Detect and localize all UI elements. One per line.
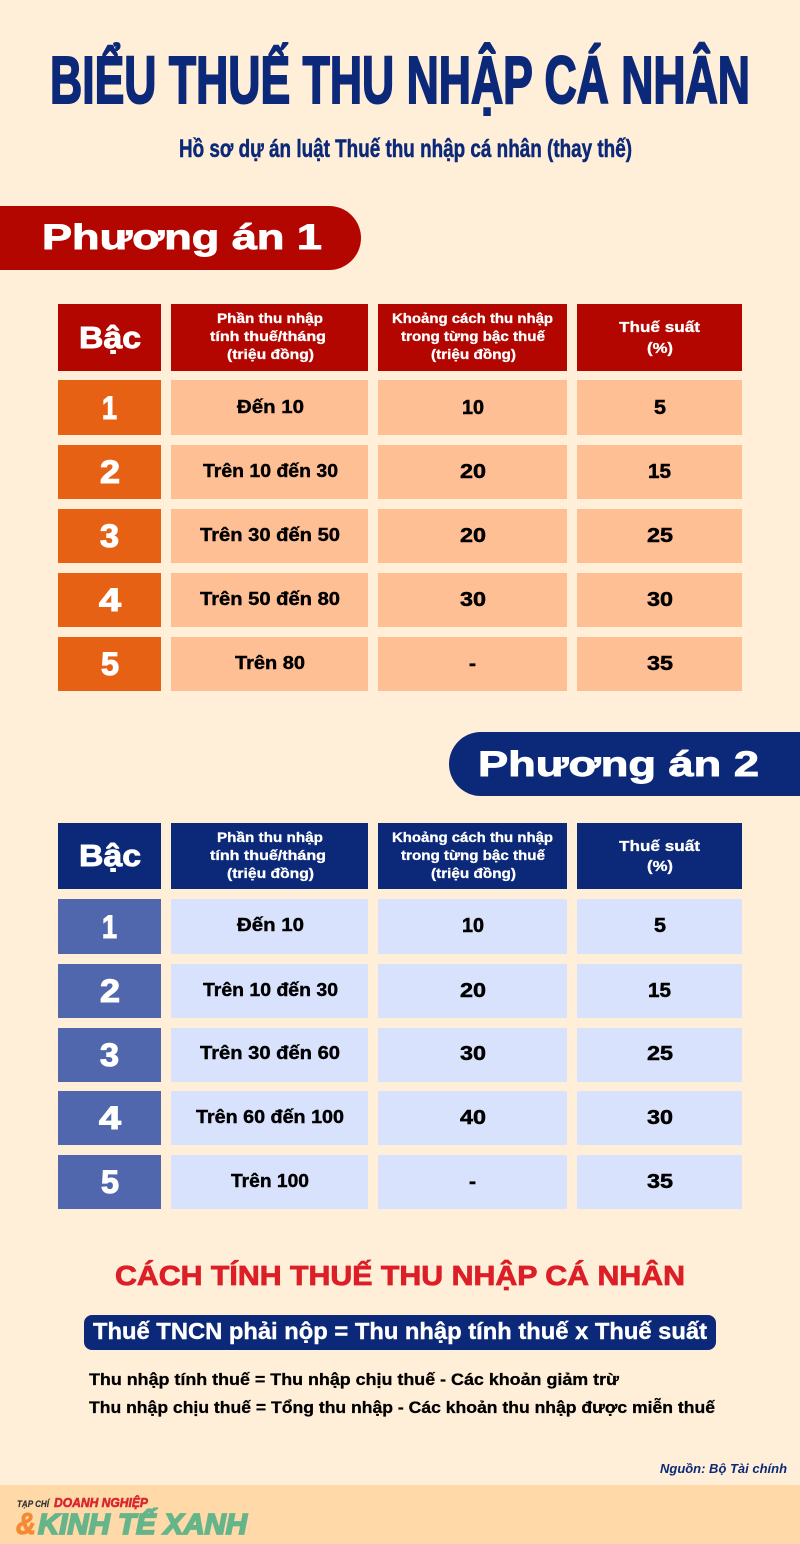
header row: Thuế suất (619, 838, 700, 855)
row 5: 5 (101, 646, 119, 682)
row 2 (58, 445, 742, 499)
formula text line 2: Thu nhập chịu thuế = Tổng thu nhập - Các khoản thu nhập được miễn thuế (89, 1398, 716, 1417)
header row: (triệu đồng) (227, 346, 314, 362)
row 5: Trên 100 (231, 1171, 309, 1191)
row 3 (58, 1028, 742, 1082)
row 3: 3 (100, 518, 119, 554)
row 5 (58, 637, 742, 691)
row 1 (58, 899, 742, 954)
header row: (triệu đồng) (431, 346, 516, 362)
formula pill (84, 1315, 716, 1350)
logo: Tạp chí Doanh nghiệp & Kinh tế Xanh: & (16, 1506, 36, 1541)
row 4: Trên 60 đến 100 (196, 1107, 344, 1127)
subtitle: Hồ sơ dự án luật Thuế thu nhập cá nhân (thay thế) (179, 135, 632, 163)
header row: tính thuế/tháng (210, 328, 326, 344)
header row: (triệu đồng) (227, 865, 314, 881)
row 3 (58, 509, 742, 563)
header row: trong từng bậc thuế (401, 328, 545, 344)
header row: trong từng bậc thuế (401, 847, 545, 863)
table: Phương án 1 (58, 304, 742, 691)
row 2: 20 (460, 980, 486, 1002)
row 5: 35 (647, 653, 673, 675)
header row: (%) (647, 858, 673, 875)
header row: Khoảng cách thu nhập (392, 310, 553, 326)
row 2: Trên 10 đến 30 (203, 461, 338, 481)
row 1: 1 (102, 909, 117, 945)
row 1: 5 (654, 397, 666, 419)
formula pill: Thuế TNCN phải nộp = Thu nhập tính thuế x Thuế suất (93, 1318, 707, 1344)
header row: Bậc (79, 838, 141, 873)
row 1: Đến 10 (237, 397, 304, 417)
header row: Khoảng cách thu nhập (392, 829, 553, 845)
row 1: Đến 10 (237, 915, 304, 935)
row 3: Trên 30 đến 60 (200, 1043, 340, 1063)
row 4: 4 (99, 582, 121, 618)
row 3: 3 (100, 1037, 119, 1073)
section heading: how to calculate: CÁCH TÍNH THUẾ THU NHẬP CÁ NHÂN (115, 1260, 685, 1291)
row 1: 1 (102, 390, 117, 426)
row 5: 35 (647, 1171, 673, 1193)
logo: Tạp chí Doanh nghiệp & Kinh tế Xanh: KINH TẾ XANH (38, 1507, 248, 1541)
banner: Phương án 2: Phương án 2 (478, 745, 759, 784)
row 2: 2 (100, 973, 120, 1009)
footer band (0, 1485, 800, 1544)
row 3: 25 (647, 1043, 673, 1065)
table: Phương án 2 (58, 823, 742, 1209)
banner: Phương án 1 (0, 206, 361, 270)
header row: Thuế suất (619, 319, 700, 336)
row 3: Trên 30 đến 50 (200, 525, 340, 545)
row 4: 30 (647, 1107, 673, 1129)
row 4: 4 (99, 1100, 121, 1136)
row 1: 10 (462, 915, 484, 937)
row 5: - (469, 653, 476, 675)
row 2: 15 (648, 980, 671, 1002)
row 5 (58, 1155, 742, 1209)
row 2: 15 (648, 461, 671, 483)
formula text line 1: Thu nhập tính thuế = Thu nhập chịu thuế - Các khoản giảm trừ (89, 1370, 620, 1389)
banner: Phương án 2 (449, 732, 800, 796)
row 2 (58, 964, 742, 1018)
logo: Tạp chí Doanh nghiệp & Kinh tế Xanh: DOANH NGHIỆP (54, 1495, 148, 1510)
row 5: 5 (101, 1164, 119, 1200)
row 4: Trên 50 đến 80 (200, 589, 340, 609)
row 4 (58, 573, 742, 627)
row 4: 30 (460, 589, 486, 611)
header row: Bậc (79, 320, 141, 355)
header row: Phần thu nhập (217, 310, 323, 326)
row 5: Trên 80 (235, 653, 305, 673)
source note: Nguồn: Bộ Tài chính (660, 1461, 787, 1476)
header row (58, 304, 742, 371)
row 4: 40 (460, 1107, 486, 1129)
row 2: 20 (460, 461, 486, 483)
row 4: 30 (647, 589, 673, 611)
logo: Tạp chí Doanh nghiệp & Kinh tế Xanh: TẠP CHÍ (17, 1499, 51, 1510)
row 2: Trên 10 đến 30 (203, 980, 338, 1000)
row 2: 2 (100, 454, 120, 490)
row 5: - (469, 1171, 476, 1193)
header row: tính thuế/tháng (210, 847, 326, 863)
row 1 (58, 380, 742, 435)
row 3: 20 (460, 525, 486, 547)
row 3: 30 (460, 1043, 486, 1065)
row 3: 25 (647, 525, 673, 547)
logo: Tạp chí Doanh nghiệp & Kinh tế Xanh (16, 1495, 248, 1541)
row 1: 10 (462, 397, 484, 419)
header row: (triệu đồng) (431, 865, 516, 881)
banner: Phương án 1: Phương án 1 (42, 218, 322, 257)
row 1: 5 (654, 915, 666, 937)
row 4 (58, 1091, 742, 1145)
header row: Phần thu nhập (217, 829, 323, 845)
header row (58, 823, 742, 889)
header row: (%) (647, 340, 673, 357)
